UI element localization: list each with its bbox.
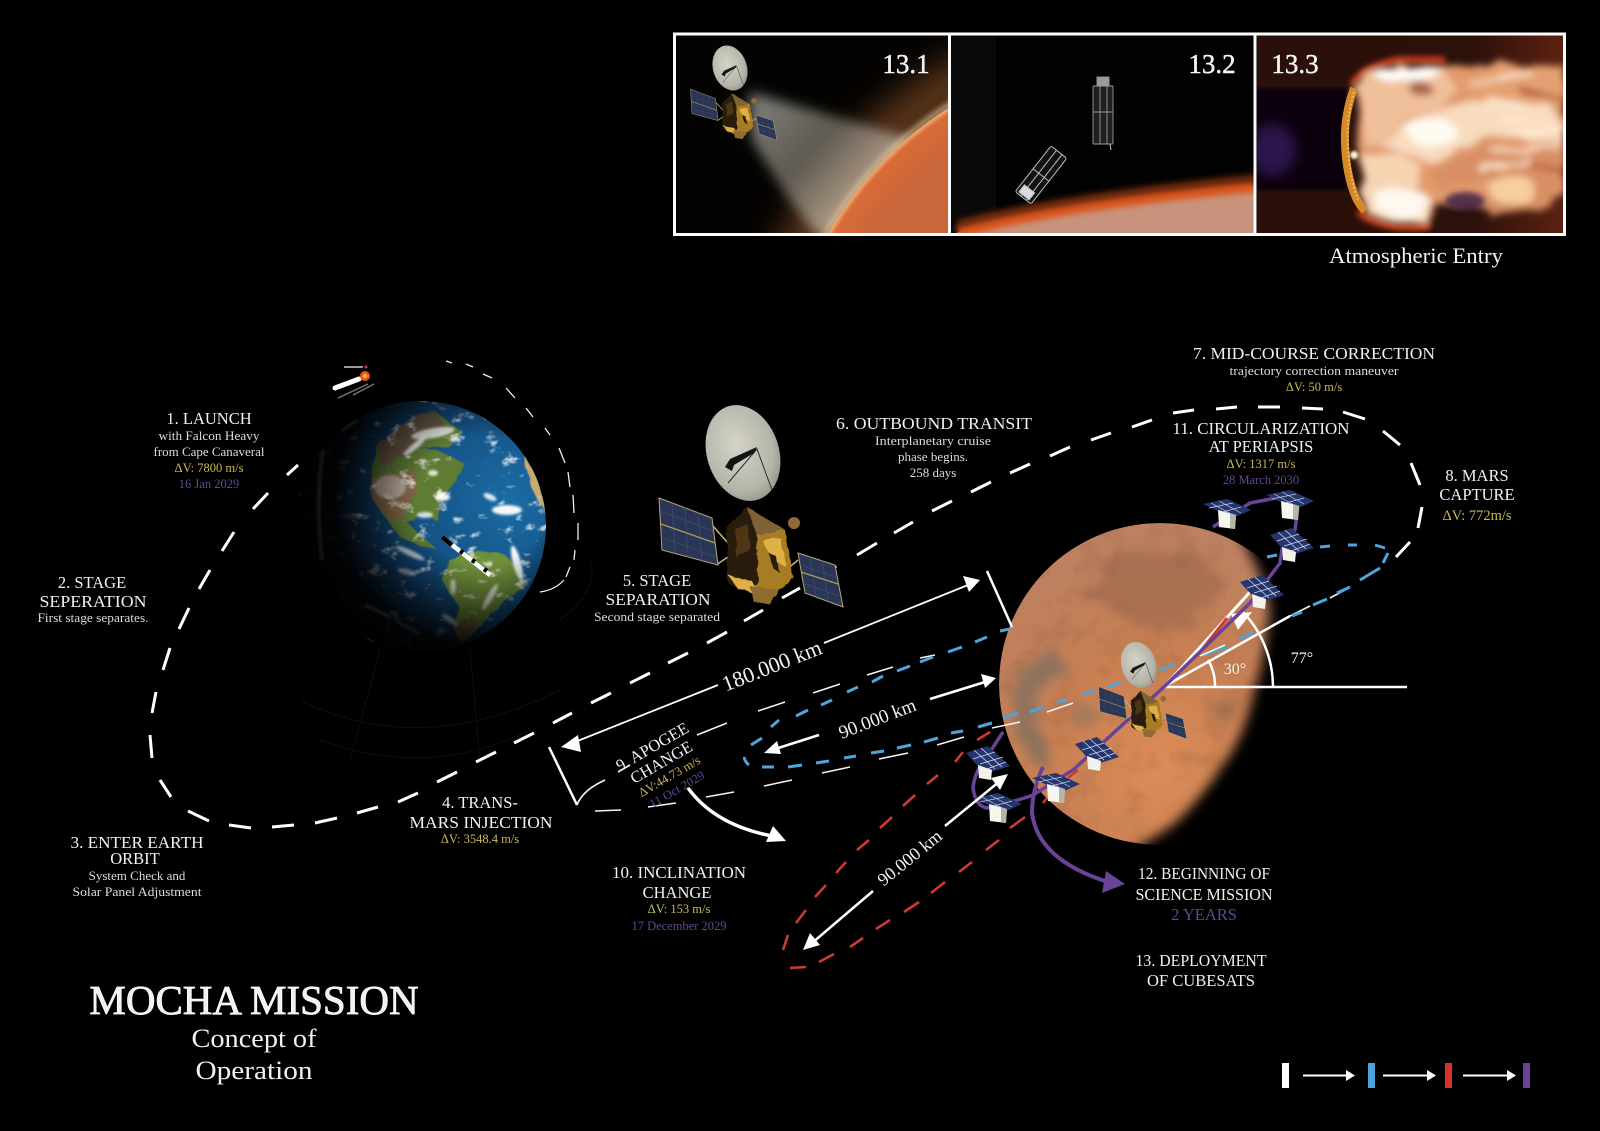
step 6: outbound transit: 6. OUTBOUND TRANSIT — [836, 414, 1032, 433]
step 11: circularization at periapsis: 28 March 2030 — [1223, 473, 1299, 487]
step 13: deployment of cubesats: OF CUBESATS — [1147, 971, 1255, 990]
icon: launch track on Earth — [442, 537, 490, 575]
step 3: enter Earth orbit — [70, 833, 204, 899]
step 2: stage separation: SEPERATION — [40, 592, 147, 611]
label 77 degrees: 77° — [1291, 650, 1313, 667]
step 3: enter Earth orbit: System Check and — [89, 868, 186, 883]
dimension: 180.000 km: 180.000 km — [718, 635, 825, 696]
step 7: mid-course correction: trajectory correction maneuver — [1230, 363, 1399, 378]
orbit: thin white capture ellipse — [577, 568, 1380, 811]
step 3: enter Earth orbit: ORBIT — [110, 849, 160, 868]
orbit: red inclined ellipse — [783, 732, 1078, 968]
step 5: stage separation: SEPARATION — [606, 590, 711, 609]
arrow: apogee change to inclination change — [688, 788, 786, 842]
image 13.2: deployed cubesats — [951, 35, 1256, 240]
subtitle: Concept of — [192, 1024, 317, 1053]
icon: large orbiter with dish — [659, 395, 843, 607]
angle lines at Mars orbit centre — [1165, 592, 1407, 687]
step 11: circularization at periapsis: AT PERIAPSIS — [1209, 437, 1313, 456]
orbit: blue intermediate ellipse — [744, 545, 1388, 767]
icon: Earth globe — [296, 400, 547, 652]
step 8: Mars capture — [1439, 466, 1515, 524]
image 13.1: orbiter releasing cubesats above Mars — [690, 36, 948, 233]
title: MOCHA MISSION — [89, 977, 419, 1023]
step 7: mid-course correction: 7. MID-COURSE CORRECTION — [1193, 344, 1435, 363]
image 13.3: fireball of atmospheric entry — [1248, 35, 1565, 234]
arc: 30 degree angle — [1208, 660, 1215, 686]
subtitle: Operation — [196, 1056, 312, 1085]
dimension: blue orbit 90.000 km — [764, 674, 996, 754]
title — [89, 977, 419, 1085]
step 2: stage separation: First stage separates. — [38, 610, 148, 625]
dimension: blue orbit 90.000 km: 90.000 km — [836, 695, 919, 744]
step 12: beginning of science mission: 2 YEARS — [1171, 905, 1237, 924]
step 9: apogee change: 9. APOGEE — [613, 718, 692, 775]
icon: cubesat — [1266, 490, 1314, 520]
step 6: outbound transit: Interplanetary cruise — [875, 433, 991, 448]
arc: 77 degree angle — [1241, 610, 1273, 686]
step 8: Mars capture: CAPTURE — [1439, 485, 1515, 504]
Mars night side — [1130, 500, 1345, 880]
step 4: trans-Mars injection: MARS INJECTION — [410, 813, 553, 832]
step 6: outbound transit — [836, 414, 1032, 480]
step 1: launch: with Falcon Heavy — [158, 428, 260, 443]
step 1: launch: 1. LAUNCH — [166, 409, 252, 428]
dimension: 180.000 km — [549, 571, 1012, 805]
icon: cubesat — [1032, 773, 1080, 803]
legend: orbit sequence colours — [1282, 1063, 1530, 1088]
step 5: stage separation: 5. STAGE — [623, 571, 691, 590]
step 1: launch: ΔV: 7800 m/s — [175, 461, 244, 475]
step 11: circularization at periapsis — [1172, 419, 1350, 487]
panel number 13.3: 13.3 — [1271, 49, 1319, 79]
step 8: Mars capture: 8. MARS — [1445, 466, 1509, 485]
icon: orbiter over Mars — [1099, 637, 1187, 739]
caption: Atmospheric Entry: Atmospheric Entry — [1329, 243, 1503, 268]
step 12: beginning of science mission — [1136, 864, 1273, 924]
label 30 degrees: 30° — [1224, 661, 1246, 678]
panel number 13.2: 13.2 — [1188, 49, 1236, 79]
step 12: beginning of science mission: 12. BEGINNING OF — [1138, 864, 1270, 883]
step 1: launch: 16 Jan 2029 — [179, 477, 239, 491]
icon: Falcon Heavy rocket — [335, 366, 374, 398]
faint orbit grid behind Earth — [300, 560, 592, 760]
step 6: outbound transit: phase begins. — [898, 449, 968, 464]
step 13: deployment of cubesats: 13. DEPLOYMENT — [1136, 951, 1266, 970]
step 10: inclination change — [612, 863, 746, 933]
step 13: deployment of cubesats — [1136, 951, 1266, 990]
step 10: inclination change: ΔV: 153 m/s — [648, 902, 710, 916]
step 6: outbound transit: 258 days — [910, 465, 956, 480]
icon: cubesat — [966, 746, 1010, 780]
step 1: launch — [154, 409, 265, 491]
panel: atmospheric entry image strip — [673, 32, 1566, 236]
step 1: launch: from Cape Canaveral — [154, 444, 265, 459]
dimension: red orbit 90.000 km — [803, 774, 1008, 950]
step 7: mid-course correction: ΔV: 50 m/s — [1286, 380, 1342, 394]
step 4: trans-Mars injection — [410, 793, 553, 846]
arrow: to beginning of science mission — [1032, 767, 1108, 882]
step 11: circularization at periapsis: ΔV: 1317 m/s — [1227, 457, 1296, 471]
step 10: inclination change: 10. INCLINATION — [612, 863, 746, 882]
step 11: circularization at periapsis: 11. CIRCULARIZATION — [1172, 419, 1350, 438]
step 9: apogee change: CHANGE — [627, 737, 696, 788]
step 8: Mars capture: ΔV: 772m/s — [1442, 508, 1512, 524]
icon: cubesat — [1270, 528, 1314, 562]
step 10: inclination change: 17 December 2029 — [631, 919, 727, 933]
step 9: apogee change: 11 Oct 2029 — [647, 768, 707, 811]
panel number 13.1: 13.1 — [882, 49, 930, 79]
step 4: trans-Mars injection: ΔV: 3548.4 m/s — [441, 832, 519, 846]
orbit: launch parking orbit around Earth — [446, 361, 578, 592]
icon: cubesat — [974, 793, 1022, 823]
orbit: white transfer trajectory — [150, 407, 1422, 828]
step 3: enter Earth orbit: Solar Panel Adjustment — [72, 884, 202, 899]
step 9: apogee change: ΔV:44.73 m/s — [636, 753, 703, 800]
step 3: enter Earth orbit: 3. ENTER EARTH — [70, 833, 204, 852]
dimension: red orbit 90.000 km: 90.000 km — [873, 826, 946, 890]
step 2: stage separation: 2. STAGE — [58, 573, 126, 592]
icon: cubesat — [1240, 575, 1284, 609]
subtitle — [192, 1024, 317, 1085]
step 5: stage separation: Second stage separated — [594, 609, 721, 624]
step 12: beginning of science mission: SCIENCE MISSION — [1136, 885, 1273, 904]
orbit: purple science orbit with cubesat deployments — [966, 490, 1314, 893]
icon: cubesat — [1203, 499, 1251, 529]
icon: Mars globe — [999, 523, 1279, 845]
step 9: apogee change — [613, 718, 715, 816]
icon: cubesat — [1075, 737, 1119, 771]
step 7: mid-course correction — [1193, 344, 1435, 394]
step 4: trans-Mars injection: 4. TRANS- — [442, 793, 518, 812]
step 5: stage separation — [594, 571, 721, 624]
step 2: stage separation — [38, 573, 148, 625]
step 10: inclination change: CHANGE — [643, 883, 711, 902]
